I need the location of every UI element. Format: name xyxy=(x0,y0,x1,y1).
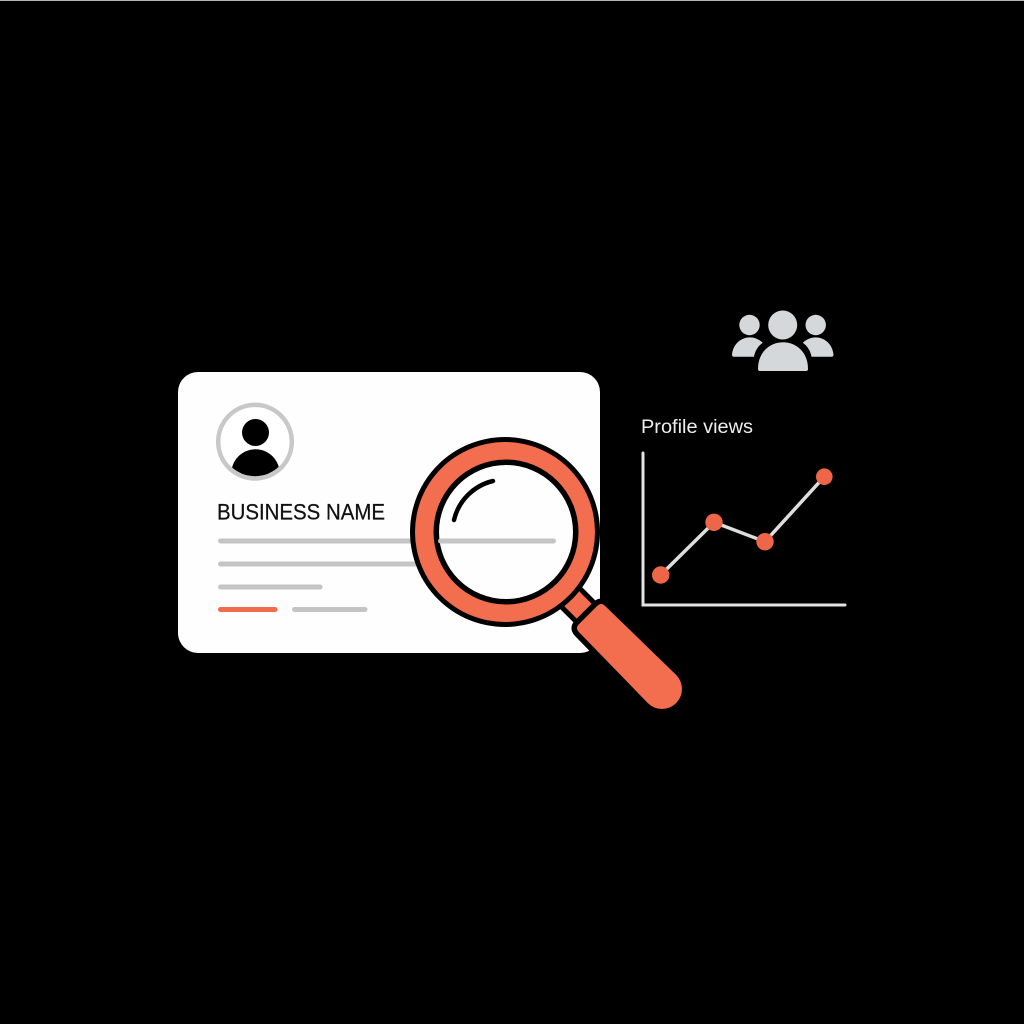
magnifier ring xyxy=(410,437,600,627)
lens highlight xyxy=(454,481,493,520)
chart axes xyxy=(643,453,845,605)
infographic canvas xyxy=(0,0,1024,709)
trend line xyxy=(661,477,824,575)
icon: avatar xyxy=(216,402,294,481)
icon: people group xyxy=(732,310,834,371)
text placeholder lines xyxy=(218,538,556,612)
chart title: Profile views xyxy=(641,416,753,438)
accent line xyxy=(218,607,278,612)
data points xyxy=(652,468,833,584)
line chart: profile views xyxy=(643,453,845,605)
line seen through the lens xyxy=(438,538,556,544)
icon: magnifying glass xyxy=(410,437,690,717)
panel: business profile card xyxy=(178,372,600,653)
heading: business name: BUSINESS NAME xyxy=(217,500,385,524)
magnifier handle xyxy=(547,574,690,717)
